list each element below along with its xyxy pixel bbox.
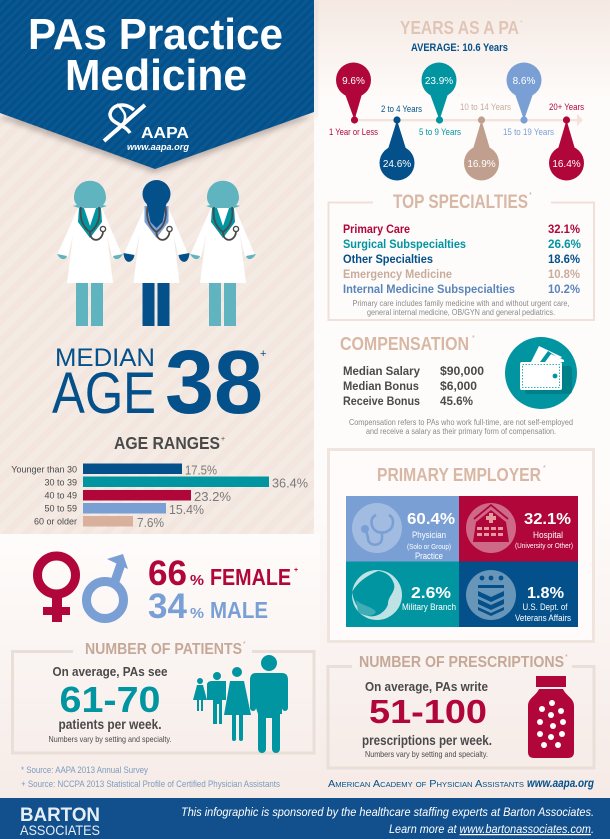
timeline labels: 1 Year or Less <box>329 127 378 138</box>
panel: number of prescriptions <box>328 654 594 768</box>
cell: physician practice: (Solo or Group) <box>407 542 451 551</box>
compensation rows: $6,000 <box>440 379 477 393</box>
specialties rows: Emergency Medicine <box>343 267 452 281</box>
timeline labels <box>329 102 584 138</box>
cell: veterans affairs: Veterans Affairs <box>515 613 571 623</box>
gender stats: % <box>190 572 204 589</box>
balloon 16.4%: 16.4% <box>552 159 581 170</box>
median age: AGE <box>52 361 156 426</box>
specialties rows <box>343 222 581 296</box>
heading: PRIMARY EMPLOYER <box>377 465 541 485</box>
cell: physician practice <box>346 496 459 562</box>
cell: military branch: 2.6% <box>411 585 451 602</box>
balloon 23.9%: 23.9% <box>425 76 453 87</box>
footnote markers: * <box>529 192 532 199</box>
footnote markers: * <box>565 654 568 661</box>
cell: veterans affairs <box>459 562 578 627</box>
specialties rows: 10.8% <box>548 267 580 281</box>
specialties rows: Other Specialties <box>343 252 433 266</box>
icon: female symbol <box>38 556 76 622</box>
compensation rows <box>343 364 484 408</box>
note: and receive a salary as their primary form of compensation. <box>366 427 556 436</box>
timeline labels: 2 to 4 Years <box>381 104 422 115</box>
cell: hospital: (University or Other) <box>515 541 573 550</box>
bar chart: age ranges: 17.5% <box>185 462 217 478</box>
note: general internal medicine, OB/GYN and general pediatrics. <box>367 308 555 317</box>
timeline labels: 10 to 14 Years <box>460 102 511 113</box>
icon: wallet <box>505 337 577 409</box>
gender stats <box>148 554 298 626</box>
heading: years as a PA <box>400 17 523 54</box>
footnote markers: * <box>472 335 475 342</box>
cell: hospital: Hospital <box>533 530 563 540</box>
footnote markers <box>243 192 568 661</box>
AAPA logo: AAPA <box>141 125 189 142</box>
bar chart: age ranges <box>11 462 308 530</box>
median age: MEDIAN <box>55 344 155 372</box>
doctor right <box>190 181 256 326</box>
cell: physician practice: Physician <box>412 530 446 540</box>
doctor middle <box>124 180 190 326</box>
panel: primary employer <box>328 450 594 642</box>
panel: number of patients <box>12 641 314 753</box>
AAPA logo <box>104 104 190 152</box>
footnote markers: * <box>543 465 546 472</box>
cell: physician practice: 60.4% <box>407 511 455 528</box>
median age: 38 <box>165 333 263 433</box>
footer bar <box>0 798 610 839</box>
compensation rows: Median Bonus <box>343 379 419 393</box>
sources <box>21 765 280 790</box>
prescriptions text: 51-100 <box>369 693 487 730</box>
gender stats: MALE <box>210 597 268 623</box>
balloon 24.6%: 24.6% <box>383 159 411 170</box>
prescriptions text: prescriptions per week. <box>362 733 492 748</box>
balloon 9.6% <box>336 62 371 124</box>
cell: military branch <box>346 562 459 627</box>
cell: hospital: 32.1% <box>524 511 571 528</box>
icon: doctors <box>57 180 256 326</box>
balloon 9.6%: 9.6% <box>342 76 365 87</box>
bar chart: age ranges: 40 to 49 <box>44 490 77 500</box>
bar chart: age ranges: Younger than 30 <box>11 464 77 474</box>
specialties rows: Primary Care <box>343 222 410 236</box>
timeline labels: 15 to 19 Years <box>503 127 554 138</box>
cell: military branch: Military Branch <box>402 602 456 612</box>
Barton Associates logo: BARTON <box>20 805 100 826</box>
note: Compensation refers to PAs who work full-time, are not self-employed <box>349 418 573 427</box>
prescriptions text: Numbers vary by setting and specialty. <box>365 749 488 759</box>
median age <box>52 333 266 433</box>
note <box>352 299 570 317</box>
Barton Associates logo <box>20 805 100 838</box>
specialties rows: 18.6% <box>548 252 580 266</box>
patients text <box>48 664 172 744</box>
sponsor text: Learn more at www.bartonassociates.com. <box>389 822 594 836</box>
note: Primary care includes family medicine with and without urgent care, <box>352 299 570 308</box>
patients text: On average, PAs see <box>52 664 168 679</box>
specialties rows: 32.1% <box>548 222 580 236</box>
compensation rows: Median Salary <box>343 364 420 378</box>
cell: physician practice: Practice <box>415 551 443 561</box>
patients text: patients per week. <box>58 717 162 732</box>
icon: pill bottle <box>528 676 574 758</box>
title text: PAs Practice <box>28 10 283 59</box>
timeline labels: 5 to 9 Years <box>419 127 461 138</box>
specialties rows: 26.6% <box>548 237 581 251</box>
Barton Associates logo: ASSOCIATES <box>20 822 100 838</box>
bar chart: age ranges: 60 or older <box>34 516 77 526</box>
median age: + <box>260 348 266 360</box>
bar chart: age ranges: 36.4% <box>272 476 308 490</box>
AAPA credit line <box>328 778 594 790</box>
cell: veterans affairs: 1.8% <box>527 585 564 602</box>
specialties rows: Surgical Subspecialties <box>343 237 466 251</box>
title text <box>28 10 283 100</box>
panel: left striped column <box>0 0 314 534</box>
heading: years as a PA: YEARS AS A PA <box>400 17 519 38</box>
balloon 8.6% <box>506 62 542 124</box>
heading: years as a PA: * <box>520 20 523 27</box>
heading: years as a PA: AVERAGE: 10.6 Years <box>411 42 508 54</box>
note <box>349 418 573 436</box>
gender stats: 34 <box>148 587 188 626</box>
balloon 16.9%: 16.9% <box>467 159 496 170</box>
gender stats: FEMALE <box>210 564 291 590</box>
heading: age ranges: + <box>221 436 225 443</box>
AAPA credit line: www.aapa.org <box>527 778 594 790</box>
sponsor text <box>181 805 594 836</box>
title text: Medicine <box>65 51 247 100</box>
icon: family <box>193 655 288 753</box>
heading: age ranges: AGE RANGES <box>114 433 220 453</box>
balloon 24.6% <box>380 116 414 180</box>
bar chart: age ranges: 30 to 39 <box>44 478 77 488</box>
heading: TOP SPECIALTIES <box>393 192 528 213</box>
bar chart: age ranges: 7.6% <box>137 515 164 530</box>
gender stats: + <box>294 567 298 574</box>
patients text: 61-70 <box>60 679 160 720</box>
icon: male symbol <box>86 554 128 618</box>
prescriptions text: On average, PAs write <box>365 679 488 694</box>
compensation rows: Receive Bonus <box>343 394 420 408</box>
panel: top specialties <box>328 192 594 320</box>
heading: COMPENSATION <box>340 333 469 354</box>
title banner <box>0 0 318 173</box>
specialties rows: Internal Medicine Subspecialties <box>343 282 515 296</box>
sources: + Source: NCCPA 2013 Statistical Profile of Certified Physician Assistants <box>21 779 280 790</box>
balloon 16.9% <box>464 116 499 180</box>
patients text: Numbers vary by setting and specialty. <box>48 734 172 744</box>
footnote markers: * <box>243 641 246 648</box>
AAPA credit line: American Academy of Physician Assistants <box>328 779 524 790</box>
balloon 16.4% <box>549 116 584 180</box>
compensation rows: $90,000 <box>440 364 484 378</box>
balloon 23.9% <box>422 62 456 124</box>
sources: * Source: AAPA 2013 Annual Survey <box>21 765 148 776</box>
doctor left <box>57 181 123 326</box>
compensation rows: 45.6% <box>440 394 473 408</box>
prescriptions text <box>362 679 492 759</box>
gender stats: % <box>190 605 204 622</box>
cell: hospital <box>459 496 578 562</box>
panel: compensation <box>340 333 577 436</box>
bar chart: age ranges: 23.2% <box>194 489 231 504</box>
specialties rows: 10.2% <box>548 282 580 296</box>
heading: NUMBER OF PRESCRIPTIONS <box>359 654 564 671</box>
gender stats: 66 <box>148 554 187 593</box>
balloon 8.6%: 8.6% <box>513 76 536 87</box>
bar chart: age ranges: 15.4% <box>169 502 204 517</box>
cell: veterans affairs: U.S. Dept. of <box>522 602 568 612</box>
heading: NUMBER OF PATIENTS <box>85 641 242 658</box>
timeline: years as a PA <box>329 62 584 180</box>
bar chart: age ranges: 50 to 59 <box>44 504 77 514</box>
AAPA logo: www.aapa.org <box>127 142 190 152</box>
timeline labels: 20+ Years <box>549 102 584 113</box>
